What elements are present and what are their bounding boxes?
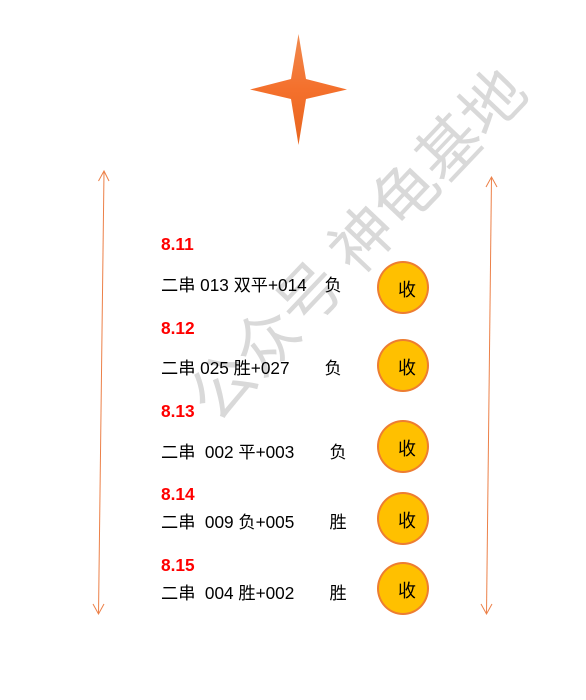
watermark: 公众号 神龟基地 bbox=[165, 45, 544, 438]
result row: 8.11: 二串 013 双平+014 bbox=[161, 275, 307, 295]
badge: 8.15 bbox=[377, 562, 429, 615]
result row: 8.15: 二串 004 胜+002 bbox=[161, 583, 294, 603]
date: 8.13: 8.13 bbox=[161, 401, 195, 421]
result row: 8.12: 二串 025 胜+027 bbox=[161, 358, 290, 378]
badge: 8.12 bbox=[377, 339, 429, 392]
outcome: 8.13: 负 bbox=[330, 442, 347, 462]
badge: 8.11 bbox=[377, 261, 429, 314]
badge: 8.15: 收 bbox=[398, 581, 416, 601]
badge: 8.11: 收 bbox=[398, 280, 416, 300]
badge: 8.13 bbox=[377, 420, 429, 473]
date: 8.11: 8.11 bbox=[161, 234, 194, 254]
date: 8.12: 8.12 bbox=[161, 318, 195, 338]
outcome: 8.11: 负 bbox=[324, 275, 342, 295]
date: 8.14: 8.14 bbox=[161, 484, 195, 504]
date: 8.15: 8.15 bbox=[161, 555, 195, 575]
outcome: 8.15: 胜 bbox=[330, 583, 347, 603]
outcome: 8.14: 胜 bbox=[330, 512, 347, 532]
outcome: 8.12: 负 bbox=[324, 358, 342, 378]
badge: 8.12: 收 bbox=[398, 358, 416, 378]
badge: 8.13: 收 bbox=[398, 439, 416, 459]
icon: four-pointed star bbox=[250, 34, 347, 145]
badge: 8.14: 收 bbox=[398, 511, 416, 531]
result row: 8.13: 二串 002 平+003 bbox=[161, 442, 294, 462]
result row: 8.14: 二串 009 负+005 bbox=[161, 512, 294, 532]
badge: 8.14 bbox=[377, 492, 429, 545]
